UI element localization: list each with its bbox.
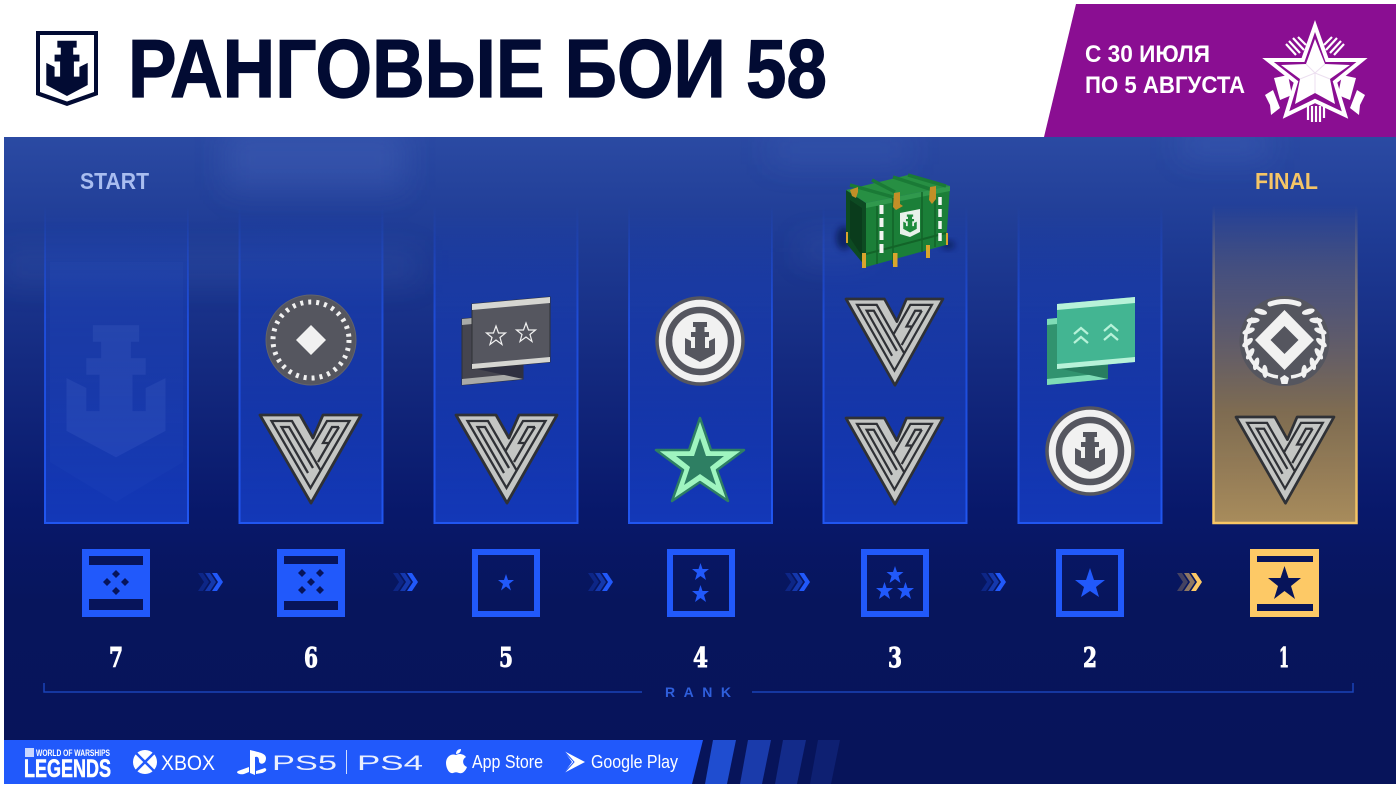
start label: START — [80, 168, 149, 194]
arrow 5 to 4 — [588, 573, 613, 591]
platform: Xbox: XBOX — [161, 752, 215, 775]
rank numbers: 5 — [499, 643, 513, 674]
rank numbers: 7 — [109, 643, 123, 674]
platform: PlayStation: PS4 — [357, 752, 424, 775]
icon: anchor coin — [657, 298, 743, 384]
icon: green crate — [836, 175, 955, 268]
arrow 7 to 6 — [198, 573, 223, 591]
column: rank 1 final — [1214, 168, 1356, 523]
date text: ПО 5 АВГУСТА — [1085, 72, 1245, 99]
icon: anchor coin — [1047, 408, 1133, 494]
platform: Google Play: Google Play — [591, 752, 678, 772]
platform: PlayStation — [237, 750, 424, 775]
rank numbers — [109, 643, 1289, 674]
platform: Google Play — [564, 751, 678, 773]
icon: chevron badge — [846, 418, 943, 504]
arrow 4 to 3 — [785, 573, 810, 591]
rank icon 1 — [1250, 549, 1319, 617]
column: rank 4 — [629, 205, 772, 523]
header logo: shield with anchor — [36, 31, 98, 106]
date text: С 30 ИЮЛЯ — [1085, 41, 1210, 68]
date banner — [1044, 4, 1396, 137]
platform: App Store — [446, 749, 543, 773]
icon: chevron badge — [846, 299, 943, 385]
rank numbers: 6 — [304, 643, 318, 674]
column: rank 2 — [1018, 205, 1162, 523]
rank icon 3 — [864, 552, 926, 614]
final label: FINAL — [1255, 168, 1318, 194]
icon: green flag with chevrons — [1047, 297, 1135, 385]
icon: ghost shield — [50, 262, 183, 502]
platform: PlayStation: PS5 — [272, 752, 337, 775]
column: rank 3 — [824, 175, 966, 523]
column: rank 5 — [434, 205, 578, 523]
panel: footer bar with platforms — [4, 740, 840, 784]
icon: chevron badge — [260, 415, 361, 503]
column: rank 7 start — [45, 168, 188, 523]
rank label: RANK — [665, 684, 731, 700]
brand: World of Warships Legends — [24, 748, 111, 783]
title: РАНГОВЫЕ БОИ 58 — [128, 22, 827, 115]
rank numbers: 3 — [888, 643, 902, 674]
rank numbers: 1 — [1279, 643, 1289, 674]
icon: grey flag with stars — [462, 297, 550, 385]
arrow 6 to 5 — [393, 573, 418, 591]
rank axis — [44, 683, 1353, 700]
icon: green star — [656, 418, 744, 501]
brand: World of Warships Legends: WORLD OF WARSHIPS — [36, 748, 110, 759]
rank numbers: 2 — [1083, 643, 1097, 674]
rank icon 4 — [670, 552, 732, 614]
date text — [1085, 41, 1245, 99]
icon: chevron badge — [1236, 417, 1334, 503]
brand: World of Warships Legends: LEGENDS — [24, 755, 111, 783]
column: rank 6 — [240, 205, 382, 523]
icon: wreath emblem — [1240, 296, 1330, 386]
rank icon 6 — [277, 549, 345, 617]
rank icon 5 — [475, 552, 537, 614]
rank icon 7 — [82, 549, 150, 617]
footer stripes — [705, 740, 840, 784]
arrow 3 to 2 — [981, 573, 1006, 591]
platform: App Store: App Store — [472, 752, 543, 772]
icon: ranked star emblem — [1265, 26, 1365, 122]
icon: diamond token — [266, 295, 356, 385]
icon: chevron badge — [456, 415, 557, 503]
arrow 2 to 1 — [1177, 573, 1202, 591]
rank icon 2 — [1059, 552, 1121, 614]
rank numbers: 4 — [693, 643, 708, 674]
platform: Xbox — [133, 750, 215, 775]
